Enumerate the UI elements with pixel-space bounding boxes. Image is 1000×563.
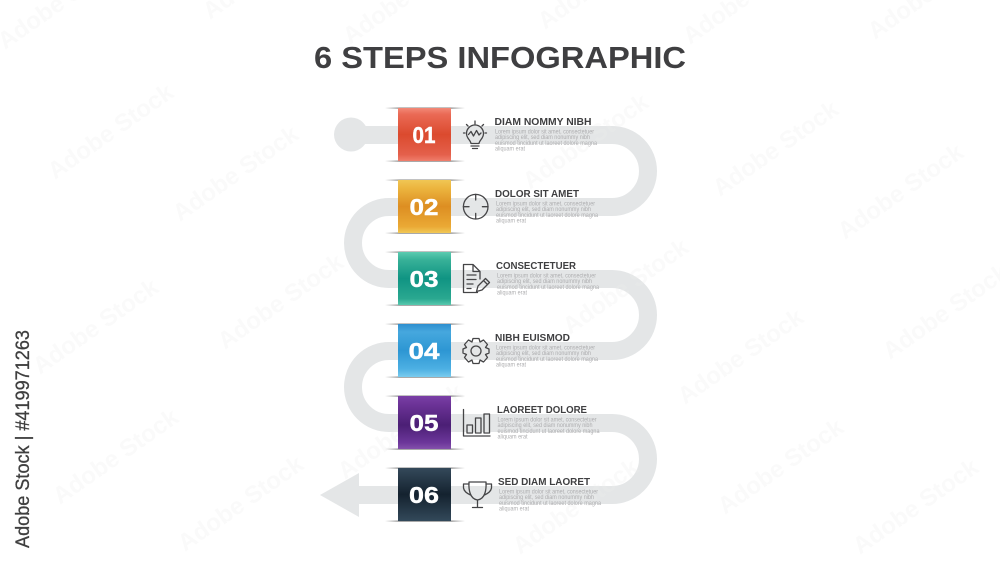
step 4 number tab: 04 bbox=[408, 338, 440, 364]
text block: step 4: adipiscing elit, sed diam nonummy nibh bbox=[496, 351, 591, 357]
step 1 bbox=[385, 108, 598, 162]
text block: step 3: aliquam erat bbox=[497, 290, 527, 296]
text block: step 3: adipiscing elit, sed diam nonummy nibh bbox=[497, 279, 592, 285]
step 5 bbox=[385, 396, 600, 450]
title: 6 STEPS INFOGRAPHIC bbox=[314, 40, 686, 75]
step 1 number tab: 01 bbox=[412, 122, 436, 148]
text: Adobe Stock bbox=[848, 453, 984, 560]
text: Adobe Stock bbox=[48, 403, 184, 510]
text block: step 2: Lorem ipsum dolor sit amet, consectetuer bbox=[496, 202, 595, 208]
text block: step 1: adipiscing elit, sed diam nonummy nibh bbox=[495, 135, 590, 141]
text block: step 3: euismod tincidunt ut laoreet dolore magna bbox=[497, 285, 600, 291]
step 2 number tab: 02 bbox=[410, 194, 438, 220]
text block: step 2: adipiscing elit, sed diam nonummy nibh bbox=[496, 207, 591, 213]
text block: step 4: aliquam erat bbox=[496, 362, 526, 368]
step 1 number tab bbox=[385, 108, 465, 162]
icon: bar chart bbox=[464, 410, 490, 436]
text block: step 6 bbox=[499, 490, 602, 512]
icon: document with pencil bbox=[464, 264, 490, 292]
step 3 number tab bbox=[385, 252, 465, 306]
text block: step 3 bbox=[497, 274, 600, 296]
step 2 bbox=[385, 180, 599, 234]
text: Adobe Stock bbox=[213, 248, 349, 355]
text block: step 1: aliquam erat bbox=[495, 146, 525, 152]
text block: step 4: Lorem ipsum dolor sit amet, consectetuer bbox=[496, 346, 595, 352]
text: Adobe Stock bbox=[673, 303, 809, 410]
icon: light bulb bbox=[464, 121, 486, 148]
step 5 number tab: 05 bbox=[410, 410, 439, 436]
step 3 number tab: 03 bbox=[410, 266, 438, 292]
text block: step 4: euismod tincidunt ut laoreet dolore magna bbox=[496, 357, 599, 363]
text: Adobe Stock bbox=[518, 88, 654, 195]
text block: step 5: Lorem ipsum dolor sit amet, consectetuer bbox=[498, 418, 596, 424]
heading: step 4: NIBH EUISMOD bbox=[495, 332, 570, 344]
text block: step 5: adipiscing elit, sed diam nonummy nibh bbox=[498, 423, 592, 429]
icon: trophy bbox=[464, 482, 492, 508]
text block: step 5 bbox=[498, 418, 600, 440]
text: Adobe Stock bbox=[43, 78, 179, 185]
heading: step 3: CONSECTETUER bbox=[496, 260, 576, 272]
heading: step 2: DOLOR SIT AMET bbox=[495, 188, 580, 200]
step 3 bbox=[385, 252, 600, 306]
text block: step 1: Lorem ipsum dolor sit amet, consectetuer bbox=[495, 130, 594, 136]
text block: step 6: euismod tincidunt ut laoreet dolore magna bbox=[499, 501, 602, 507]
text: Adobe Stock bbox=[173, 450, 309, 557]
text block: step 6: aliquam erat bbox=[499, 506, 529, 512]
text: Adobe Stock bbox=[833, 138, 969, 245]
winding path with start dot and end arrow bbox=[320, 118, 648, 517]
step 2 number tab bbox=[385, 180, 465, 234]
stock image credit: Adobe Stock | #419971263 bbox=[13, 330, 34, 548]
text block: step 6: Lorem ipsum dolor sit amet, consectetuer bbox=[499, 490, 598, 496]
text: Adobe Stock bbox=[168, 120, 304, 227]
text block: step 1: euismod tincidunt ut laoreet dolore magna bbox=[495, 141, 598, 147]
text block: step 2: euismod tincidunt ut laoreet dolore magna bbox=[496, 213, 599, 219]
step 6 number tab: 06 bbox=[409, 482, 439, 508]
text: Adobe Stock bbox=[708, 95, 844, 202]
text block: step 5: euismod tincidunt ut laoreet dolore magna bbox=[498, 429, 600, 435]
text: Adobe Stock bbox=[508, 453, 644, 560]
text block: step 2 bbox=[496, 202, 599, 224]
text block: step 4 bbox=[496, 346, 599, 368]
text: Adobe Stock bbox=[558, 233, 694, 340]
text: Adobe Stock bbox=[333, 378, 469, 485]
text block: step 6: adipiscing elit, sed diam nonummy nibh bbox=[499, 495, 594, 501]
heading: step 1: DIAM NOMMY NIBH bbox=[494, 116, 592, 128]
text: Adobe Stock bbox=[713, 413, 849, 520]
text block: step 3: Lorem ipsum dolor sit amet, consectetuer bbox=[497, 274, 596, 280]
step 4 number tab bbox=[385, 324, 465, 378]
heading: step 6: SED DIAM LAORET bbox=[498, 476, 591, 488]
step 4 bbox=[385, 324, 599, 378]
step 5 number tab bbox=[385, 396, 465, 450]
text block: step 5: aliquam erat bbox=[498, 434, 528, 440]
text: Adobe Stock bbox=[28, 273, 164, 380]
text block: step 2: aliquam erat bbox=[496, 218, 526, 224]
step 6 bbox=[385, 468, 602, 522]
icon: gear bbox=[463, 338, 489, 364]
step 6 number tab bbox=[385, 468, 465, 522]
heading: step 5: LAOREET DOLORE bbox=[497, 404, 587, 416]
text block: step 1 bbox=[495, 130, 598, 152]
icon: target crosshair bbox=[463, 194, 488, 219]
